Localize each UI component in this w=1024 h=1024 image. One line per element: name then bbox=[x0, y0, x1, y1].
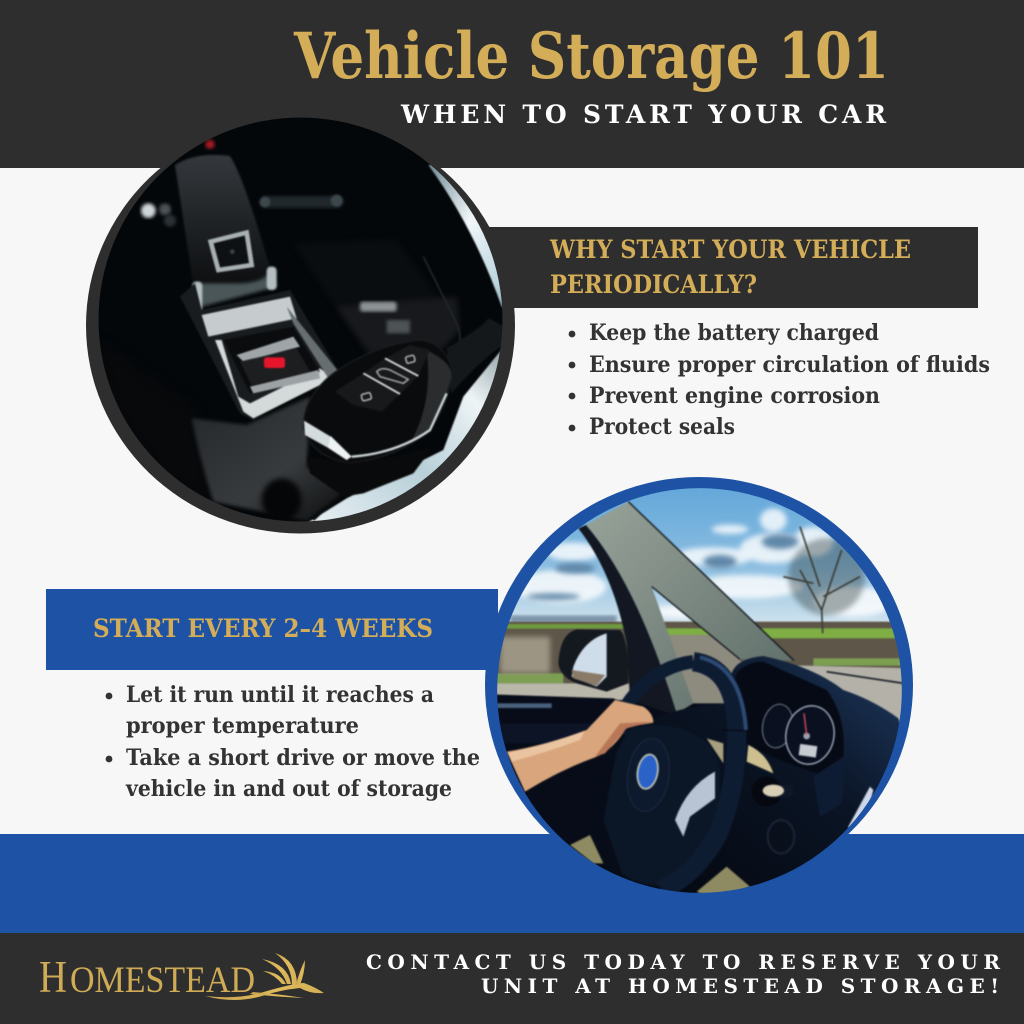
camo knee bbox=[570, 835, 750, 900]
fields bbox=[480, 622, 920, 685]
a-pillar bbox=[586, 502, 794, 713]
ford-style badge bbox=[635, 753, 661, 790]
logo grass swoosh bbox=[205, 953, 324, 1000]
logo: homestead: OMESTEAD bbox=[70, 960, 255, 1001]
bullet list: how to start: proper temperature bbox=[126, 713, 359, 739]
bullet list: reasons: Ensure proper circulation of fluids bbox=[589, 352, 990, 378]
tree bbox=[783, 527, 860, 633]
bullet list: how to start: Let it run until it reaches a bbox=[126, 682, 434, 708]
side mirror bbox=[558, 629, 628, 692]
chrome frame bbox=[180, 283, 340, 420]
dashboard bbox=[674, 655, 900, 842]
stalk and ignition bbox=[752, 777, 782, 807]
fob chrome tip bbox=[304, 421, 331, 447]
bullet list: reasons bbox=[569, 320, 990, 440]
steering wheel hub bbox=[603, 725, 720, 893]
title: Vehicle Storage 101 bbox=[293, 19, 889, 94]
footer band bbox=[0, 933, 1024, 1024]
heading text: why start: WHY START YOUR VEHICLE bbox=[549, 235, 911, 264]
arm and hand bbox=[507, 700, 653, 792]
bullet list: how to start: vehicle in and out of storage bbox=[125, 776, 452, 802]
horizon hills bbox=[510, 615, 617, 623]
bullet list: reasons: Prevent engine corrosion bbox=[589, 383, 880, 409]
heading bar: why start bbox=[480, 227, 978, 308]
dark strip along pillar bbox=[578, 525, 680, 717]
fob buttons bbox=[335, 345, 430, 412]
call to action: UNIT AT HOMESTEAD STORAGE! bbox=[481, 974, 999, 998]
bullet list: how to start bbox=[106, 682, 480, 802]
steering wheel rim bbox=[627, 662, 693, 705]
red indicator bbox=[264, 357, 285, 368]
call to action: CONTACT US TODAY TO RESERVE YOUR bbox=[366, 950, 1000, 974]
silver spoke bbox=[675, 772, 715, 837]
windshield bottom seal bbox=[827, 672, 903, 683]
photo: hand on steering wheel in blue circle bbox=[480, 470, 920, 910]
chrome trim right bbox=[428, 164, 502, 308]
header band bbox=[0, 0, 1024, 168]
clouds bbox=[513, 508, 893, 618]
gear shifter handle bbox=[175, 155, 277, 287]
logo: homestead bbox=[39, 952, 324, 1002]
heading text: why start: PERIODICALLY? bbox=[550, 270, 757, 299]
heading text: start every: START EVERY 2–4 WEEKS bbox=[93, 614, 433, 643]
bottom blue band bbox=[0, 834, 1024, 933]
bullet list: reasons: Protect seals bbox=[589, 414, 735, 440]
lower console bbox=[192, 397, 343, 521]
key fob bbox=[303, 340, 453, 463]
heading bar: start every bbox=[46, 589, 498, 670]
subtitle: WHEN TO START YOUR CAR bbox=[400, 100, 886, 129]
bullet list: reasons: Keep the battery charged bbox=[589, 320, 879, 346]
shifter button bbox=[211, 233, 252, 270]
logo: homestead: H bbox=[39, 952, 67, 1002]
door panel bbox=[497, 694, 618, 701]
photo: car key fob in dark circle bbox=[80, 110, 523, 543]
bullet list: how to start: Take a short drive or move the bbox=[126, 745, 480, 771]
gauges bbox=[759, 702, 839, 768]
